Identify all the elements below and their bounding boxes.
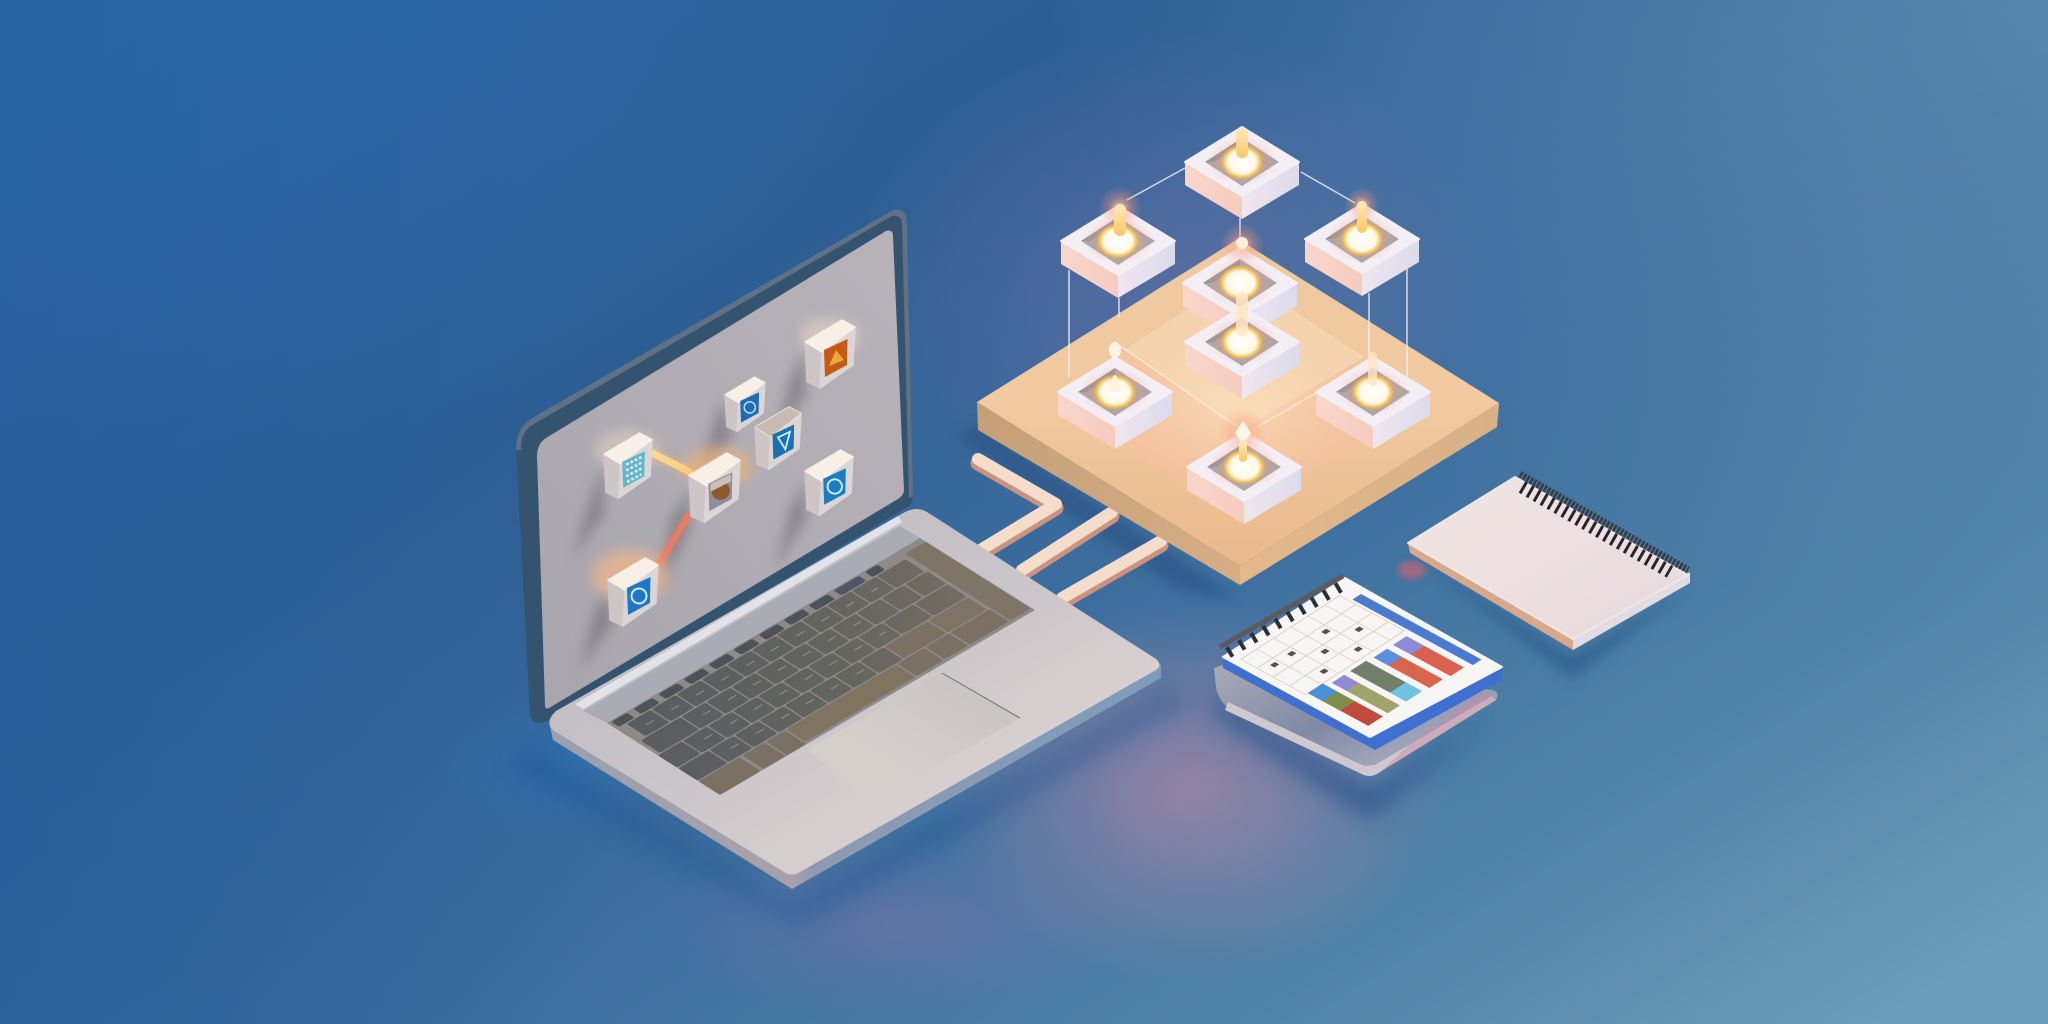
screen tile: centre photo xyxy=(683,447,752,522)
laptop xyxy=(516,210,1161,889)
wooden platform xyxy=(977,239,1499,585)
calendar page xyxy=(1223,578,1502,737)
calendar grid xyxy=(1241,595,1404,695)
tube two xyxy=(1022,512,1112,574)
screen tile: lower left glowing xyxy=(592,550,668,626)
laptop base xyxy=(549,509,1161,889)
floor shadows xyxy=(500,425,1695,925)
trackpad xyxy=(808,673,1020,796)
glowing connectors on screen xyxy=(652,453,692,567)
tube one xyxy=(978,459,1056,553)
node: front on platform xyxy=(1187,408,1301,524)
keyboard xyxy=(608,539,1033,795)
laptop lid xyxy=(516,210,913,723)
tube three xyxy=(1062,541,1161,602)
calendar spiral xyxy=(1220,576,1343,653)
node: left on platform xyxy=(1058,342,1172,449)
node: right on platform xyxy=(1316,352,1430,449)
calendar base xyxy=(1214,640,1498,776)
front row keys xyxy=(699,609,1011,795)
calendar colour stripes xyxy=(1393,636,1464,676)
node: left floating xyxy=(1061,186,1175,298)
tubes connecting laptop to platform xyxy=(978,459,1161,602)
notebook xyxy=(1408,474,1690,650)
calendar content xyxy=(1241,588,1481,731)
node: middle on platform xyxy=(1185,292,1299,399)
tile shadows on screen xyxy=(572,350,806,670)
screen tile: upper right orange xyxy=(800,318,860,388)
notebook spiral xyxy=(1520,474,1688,572)
calendar blue edge xyxy=(1223,657,1502,750)
screen tile: lower right xyxy=(805,450,853,515)
connection lines between nodes xyxy=(1069,168,1407,377)
node: top floating xyxy=(1185,127,1299,219)
node: back on platform xyxy=(1183,223,1297,340)
key legend marks xyxy=(646,588,938,763)
node: right floating xyxy=(1305,187,1419,296)
screen tile: upper middle xyxy=(725,377,765,431)
screen tile: top left xyxy=(594,429,660,498)
calendar header bar xyxy=(1352,594,1481,665)
side bar key xyxy=(905,542,1031,621)
calendar xyxy=(1214,576,1502,776)
key rows xyxy=(617,558,987,781)
screen tile: centre right xyxy=(755,407,801,470)
back row keys xyxy=(611,565,885,727)
notebook cover xyxy=(1408,543,1573,650)
